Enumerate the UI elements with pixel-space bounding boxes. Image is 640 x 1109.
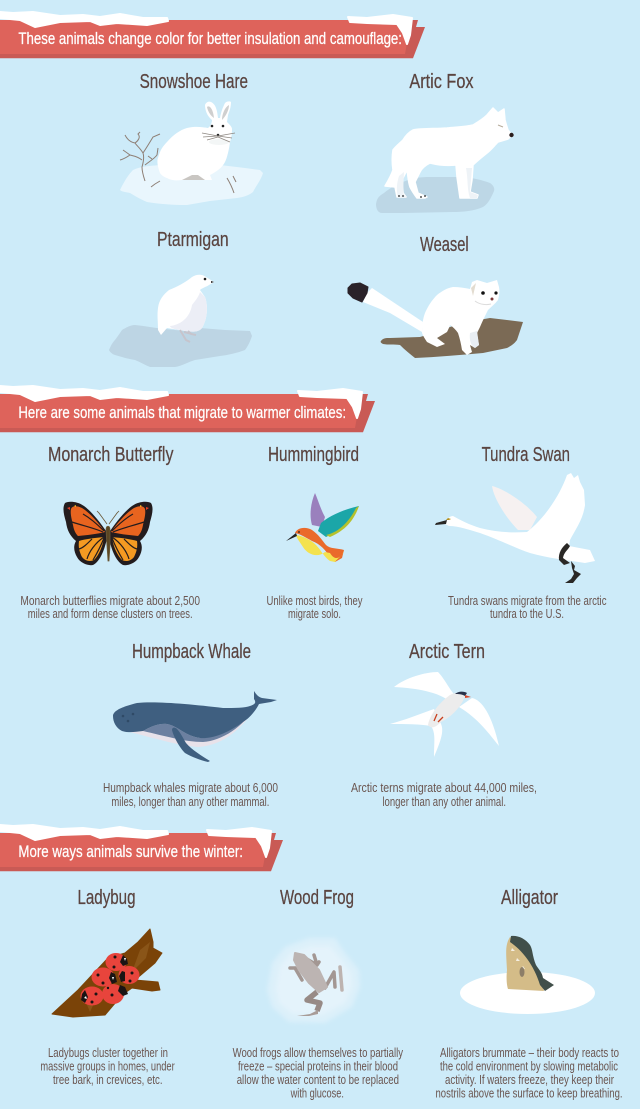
- description: tree bark, in crevices, etc.: [53, 1073, 162, 1087]
- ladybug column: [40, 887, 175, 1087]
- title: Ladybug: [78, 887, 136, 909]
- title: Humpback Whale: [132, 641, 251, 663]
- title: Artic Fox: Artic Fox: [409, 71, 474, 93]
- title: Wood Frog: [280, 887, 354, 909]
- description: freeze – special proteins in their blood: [238, 1060, 398, 1074]
- monarch butterfly column: [20, 444, 200, 621]
- icon: arctic tern: [390, 672, 499, 757]
- description: [233, 1046, 404, 1100]
- icon: ladybugs on bark: [52, 929, 162, 1017]
- right wings: [108, 502, 153, 565]
- description: migrate solo.: [288, 607, 341, 621]
- banner: more ways: [0, 825, 283, 871]
- title: Arctic Tern: [409, 641, 485, 663]
- banner text: More ways animals survive the winter:: [18, 842, 243, 861]
- icon: arctic fox: [376, 108, 514, 213]
- hummingbird column: [266, 444, 363, 621]
- tundra swan column: [435, 444, 606, 621]
- icon: alligator snout in ice: [460, 936, 595, 1014]
- description: [103, 781, 278, 809]
- icon: tundra swan: [435, 473, 595, 583]
- title: Snowshoe Hare: Snowshoe Hare: [140, 71, 248, 93]
- description: [40, 1046, 175, 1087]
- description: longer than any other animal.: [382, 795, 506, 809]
- description: Humpback whales migrate about 6,000: [103, 781, 278, 795]
- icon: monarch butterfly: [63, 502, 153, 565]
- description: allow the water content to be replaced: [237, 1073, 399, 1087]
- title: Tundra Swan: [482, 444, 570, 466]
- humpback whale column: [103, 641, 278, 809]
- description: Unlike most birds, they: [266, 594, 363, 608]
- arctic tern column: [351, 641, 537, 809]
- description: Monarch butterflies migrate about 2,500: [20, 594, 200, 608]
- left wings: [63, 502, 108, 565]
- icon: snowshoe hare: [120, 101, 263, 205]
- icon: ptarmigan: [109, 275, 252, 367]
- title: Monarch Butterfly: [48, 444, 174, 466]
- banner text: Here are some animals that migrate to warmer climates:: [18, 403, 346, 422]
- description: tundra to the U.S.: [490, 607, 564, 621]
- title: Hummingbird: [268, 444, 359, 466]
- description: miles and form dense clusters on trees.: [28, 607, 193, 621]
- description: massive groups in homes, under: [40, 1060, 175, 1074]
- icon: frozen wood frog: [267, 938, 360, 1023]
- title: Ptarmigan: Ptarmigan: [157, 229, 229, 251]
- description: Wood frogs allow themselves to partially: [233, 1046, 404, 1060]
- description: Arctic terns migrate about 44,000 miles,: [351, 781, 537, 795]
- title: Alligator: [501, 887, 558, 909]
- icon: weasel: [348, 280, 523, 358]
- description: with glucose.: [290, 1086, 344, 1100]
- butterfly body: [97, 511, 119, 561]
- wood frog column: [233, 887, 404, 1100]
- description: [351, 781, 537, 809]
- alligator column: [436, 887, 622, 1100]
- description: Ladybugs cluster together in: [48, 1046, 168, 1060]
- snow cap: [0, 12, 412, 44]
- description: [436, 1046, 622, 1100]
- banner: color change: [0, 12, 425, 58]
- description: miles, longer than any other mammal.: [111, 795, 269, 809]
- description: [266, 594, 363, 621]
- description: [448, 594, 606, 621]
- title: Weasel: Weasel: [420, 234, 469, 256]
- description: [20, 594, 200, 621]
- snow cap: [0, 825, 271, 857]
- icon: humpback whale: [113, 691, 277, 762]
- snow cap: [0, 386, 362, 418]
- banner text: These animals change color for better insulation and camouflage:: [18, 29, 402, 48]
- banner: migrate: [0, 386, 375, 432]
- icon: hummingbird: [286, 493, 359, 562]
